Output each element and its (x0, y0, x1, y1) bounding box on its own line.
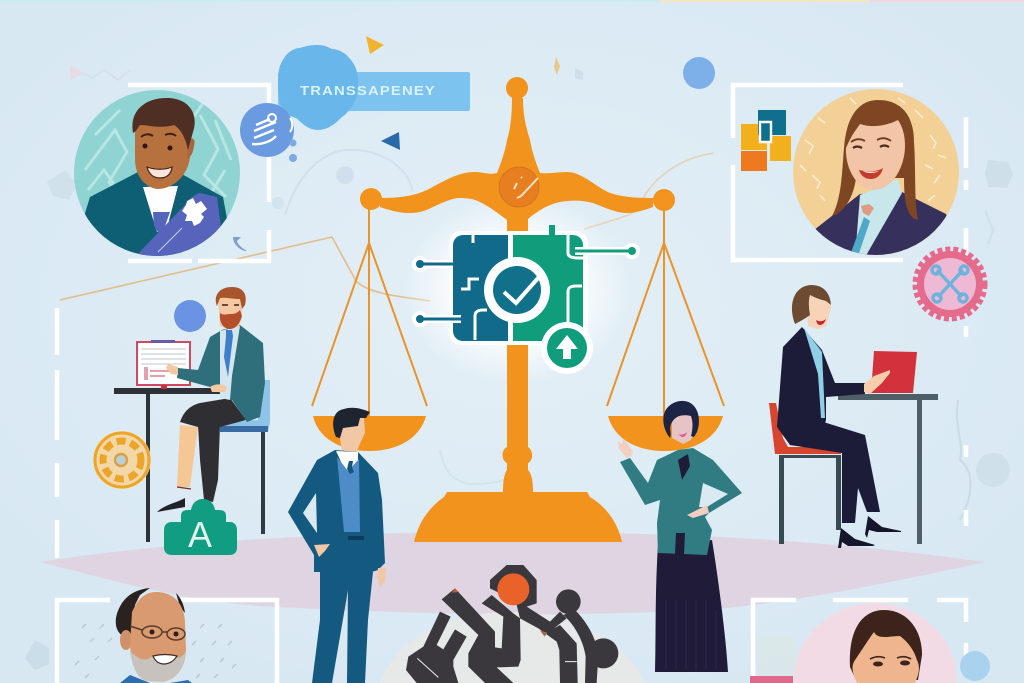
portrait: woman top right (793, 89, 966, 264)
blue dot (174, 300, 206, 332)
icon: small arrow under portrait (233, 237, 247, 251)
gap between arm and torso (303, 493, 317, 533)
label: transparency banner: TRANSSAPENEY (300, 84, 436, 98)
balance scale (312, 77, 724, 542)
portrait: woman bottom right (793, 603, 957, 683)
icon: coloured squares (741, 110, 791, 171)
gap between arm and hip (699, 483, 728, 507)
icon: dark tool cluster (406, 565, 618, 683)
jacket (288, 450, 385, 572)
white glow behind chip (402, 195, 632, 385)
icon: yellow gear (93, 431, 151, 489)
head (218, 297, 242, 329)
person: seated woman with laptop (769, 285, 938, 548)
desk and laptop (838, 351, 938, 544)
icon: pink gear with wrenches (915, 249, 985, 319)
jacket (177, 325, 265, 422)
scale post and base (414, 215, 622, 542)
trousers (312, 572, 373, 683)
trousers (790, 420, 880, 523)
red chair (769, 403, 841, 544)
person: standing woman (618, 401, 742, 672)
central chip icon (412, 225, 640, 374)
hand (864, 370, 890, 394)
portrait: man top left (70, 90, 240, 264)
shirt and tie (220, 326, 240, 400)
icon: blue bubble (240, 103, 297, 162)
upload badge (541, 322, 593, 374)
portrait: man bottom left (75, 588, 236, 683)
legs (177, 425, 198, 487)
purple floor shape (40, 532, 985, 614)
pink bar bottom right (750, 676, 793, 683)
hands (377, 568, 386, 587)
jacket (620, 448, 742, 555)
icon: blue flower bottom right (960, 651, 990, 681)
shirt and vest (336, 451, 358, 477)
hands (210, 384, 227, 392)
check circle (484, 257, 550, 323)
clipboard (137, 340, 190, 389)
neck and face (338, 417, 365, 456)
icon: green cloud with letter A: A (188, 514, 212, 555)
skirt (655, 540, 728, 672)
thin connector lines (60, 153, 714, 301)
head (672, 412, 697, 444)
jacket (777, 327, 865, 447)
icon: triangles (366, 36, 583, 150)
person: seated man at desk (114, 287, 270, 542)
circuit leads (412, 243, 640, 327)
head (806, 292, 831, 329)
hands (618, 439, 633, 458)
scale beam and finial (380, 98, 653, 226)
desk (114, 388, 224, 542)
shoes (838, 516, 901, 548)
cream patch (758, 636, 794, 676)
icon: green cloud with letter A (164, 499, 237, 555)
frames: dashed white brackets (57, 85, 966, 683)
scale strings (312, 205, 724, 416)
label: transparency banner (278, 45, 470, 130)
scale centre medallion (499, 167, 539, 207)
cream glow under tool icon (380, 612, 645, 683)
person: standing man (288, 408, 386, 683)
shirt (804, 328, 825, 418)
chair (220, 380, 270, 534)
icon: blue blob top right (683, 57, 715, 89)
hair (333, 408, 370, 438)
scale pans (313, 416, 723, 451)
